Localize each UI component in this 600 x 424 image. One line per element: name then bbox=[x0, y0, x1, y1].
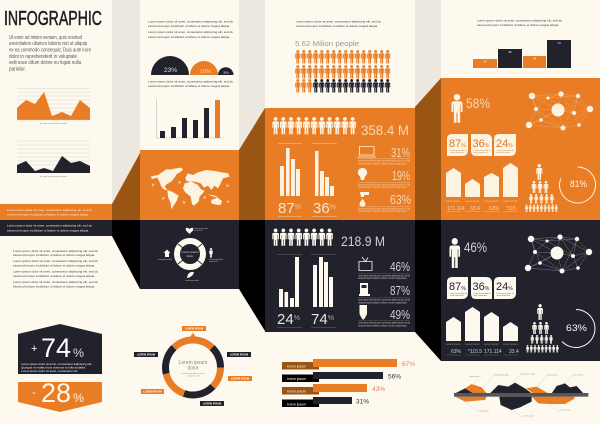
horizontal bars: lorem ipsum bbox=[287, 377, 306, 381]
house bars orange: *115 bbox=[506, 206, 516, 212]
timeline chart: Lorem ipsum dolor bbox=[493, 375, 509, 377]
callout: -28%: - bbox=[32, 387, 36, 399]
timeline chart: Lorem ipsum bbox=[478, 411, 489, 413]
band text: dark bbox=[7, 224, 92, 232]
house bars dark: *115.5 bbox=[468, 349, 482, 355]
column 3 text: eiusmod tempor incididunt ut labore et dolore magna aliqua. bbox=[296, 24, 378, 28]
stat: bulb 49%: 49% bbox=[390, 307, 410, 322]
cards orange: 24% bbox=[496, 138, 513, 150]
band text: orange bbox=[7, 208, 92, 216]
horizontal bars: lorem ipsum bbox=[287, 390, 306, 394]
icon: person bbox=[209, 248, 213, 258]
people row dark bbox=[272, 228, 333, 246]
ring labels: LOREM IPSUM bbox=[143, 390, 162, 394]
orange bar group 87% bbox=[278, 143, 302, 217]
horizontal bars: 67% bbox=[402, 361, 415, 368]
horizontal bars: 56% bbox=[388, 374, 401, 380]
semicircle chart: 16% bbox=[200, 69, 211, 75]
icon: house bbox=[164, 250, 170, 257]
cards dark: Lorem ipsum dolor sit bbox=[450, 292, 468, 295]
cards orange bbox=[447, 134, 516, 156]
cards dark: 36% bbox=[472, 281, 490, 293]
column chart top right: 52 bbox=[508, 50, 512, 54]
band text: orange: eiusmod tempor incididunt ut labore et dolore magna aliqua. bbox=[7, 212, 89, 216]
column 4 text bbox=[477, 18, 562, 27]
stat: pump 87%: eiusmod tempor incididunt ut labore et dolore magna aliqua. bbox=[358, 302, 407, 304]
stat: bulb 49%: Lorem ipsum dolor sit amet, consectetur adipiscing elit, sed do bbox=[358, 322, 411, 324]
cycle diagram: Lorem ipsum bbox=[181, 250, 199, 254]
house bars orange: 63% bbox=[489, 206, 500, 212]
timeline chart: Lorem ipsum bbox=[469, 376, 480, 378]
cards dark: amet consectetur bbox=[450, 294, 464, 297]
timeline chart: Lorem ipsum dolor bbox=[520, 374, 536, 376]
text block lower left: eiusmod tempor incididunt ut labore et dolore magna aliqua. bbox=[13, 253, 95, 257]
text block lower left: Lorem ipsum dolor sit amet, consectetur adipiscing elit, sed do bbox=[13, 249, 98, 253]
ring labels: LOREM IPSUM bbox=[230, 352, 248, 356]
stat: laptop 31%: 31% bbox=[391, 145, 410, 160]
intro paragraph: pariatur. bbox=[9, 66, 26, 72]
ring chart: dolor bbox=[187, 366, 199, 372]
area chart: orange bbox=[17, 88, 90, 125]
horizontal bars: 31% bbox=[356, 398, 369, 406]
house bars orange: Lorem ipsum bbox=[484, 200, 498, 203]
colour panels bbox=[0, 78, 600, 361]
house bars orange: 171.114 bbox=[447, 206, 465, 212]
cards orange: 36% bbox=[472, 138, 490, 150]
callout: +74%: 74 bbox=[41, 333, 71, 363]
people row orange bbox=[272, 117, 356, 134]
cards dark bbox=[447, 277, 516, 299]
orange bar group 36% bbox=[312, 143, 337, 217]
callout: -28% bbox=[18, 378, 102, 412]
cycle diagram: dolor bbox=[187, 254, 193, 258]
donut arc 63%: 63% bbox=[566, 323, 587, 333]
column chart top right: 74 bbox=[557, 41, 561, 45]
stat: pump 87%: Lorem ipsum dolor sit amet, consectetur adipiscing elit, sed do bbox=[358, 298, 411, 302]
cycle diagram bbox=[158, 227, 223, 282]
stat: tv 46%: eiusmod tempor incididunt ut labore et dolore magna aliqua. bbox=[358, 277, 407, 280]
callout: +74%: Quisque et mattis risus vivamus a nulla sodales. bbox=[21, 366, 86, 370]
house bars dark: 171.114 bbox=[484, 349, 502, 355]
area chart: dark bbox=[17, 141, 90, 178]
network diagram dark bbox=[525, 234, 592, 274]
column 2 text: eiusmod tempor incididunt ut labore et dolore magna aliqua. bbox=[148, 24, 230, 28]
network diagram orange bbox=[526, 91, 593, 130]
icon: heart bbox=[186, 228, 193, 234]
fold panels bbox=[112, 0, 441, 361]
bar chart bbox=[156, 99, 224, 138]
text block lower left bbox=[13, 249, 98, 288]
dark bar group 24% bbox=[277, 254, 302, 328]
column chart top right: 24 bbox=[483, 60, 487, 64]
icon: tv bbox=[359, 257, 372, 270]
stat: faucet 63%: 63% bbox=[390, 192, 411, 207]
callout: -28%: 28 bbox=[41, 378, 71, 408]
icon: faucet bbox=[360, 192, 369, 207]
callout: -28%: % bbox=[73, 391, 84, 405]
stat: bulb 49% bbox=[358, 305, 411, 328]
timeline chart: Lorem ipsum bbox=[559, 410, 570, 412]
people pictogram bbox=[295, 50, 390, 92]
stat: faucet 63%: Lorem ipsum dolor sit amet, consectetur adipiscing elit, sed do bbox=[358, 208, 411, 210]
people pyramid orange bbox=[525, 164, 558, 212]
cycle captions: Lorem ipsum dolor bbox=[158, 258, 172, 261]
icon: energy bulb bbox=[360, 305, 367, 320]
column chart top right: 28 bbox=[533, 56, 536, 60]
house bars orange: Lorem ipsum bbox=[465, 200, 479, 203]
house bars orange: Lorem ipsum bbox=[446, 200, 460, 203]
icon: fuel pump bbox=[359, 283, 370, 296]
orange bar group 87%: 87 bbox=[278, 200, 295, 217]
cycle captions bbox=[158, 227, 223, 282]
house bars orange bbox=[446, 163, 518, 212]
ring labels: LOREM IPSUM bbox=[185, 326, 203, 330]
semicircle chart: 23% bbox=[164, 67, 177, 74]
stat: bulb 49%: eiusmod tempor incididunt ut labore et dolore magna aliqua. bbox=[358, 324, 407, 328]
semicircle caption: Lorem ipsum dolor sit amet, consectetur adipiscing elit, sed do bbox=[148, 80, 233, 84]
cards orange: amet consectetur bbox=[474, 151, 488, 154]
cards dark: 87% bbox=[449, 281, 466, 293]
cards dark: 24% bbox=[496, 281, 513, 293]
house bars dark: 33.4 bbox=[509, 349, 519, 355]
column 2 text: Lorem ipsum dolor sit amet, consectetur adipiscing elit, sed do bbox=[148, 20, 233, 24]
area chart: orange: In non consectetur enim bbox=[40, 122, 67, 125]
ring chart: Lorem ipsum dolor sit amet bbox=[182, 372, 205, 375]
horizontal bars bbox=[282, 359, 415, 407]
ring labels bbox=[134, 326, 252, 406]
ring labels: LOREM IPSUM bbox=[137, 352, 155, 356]
column 3 text bbox=[296, 20, 381, 28]
stat: 358.4 M: 358.4 M bbox=[361, 122, 409, 138]
stat: person 58% bbox=[451, 94, 490, 123]
horizontal bars: lorem ipsum bbox=[287, 364, 306, 368]
stat: bulb 19%: eiusmod tempor incididunt ut labore et dolore magna aliqua. bbox=[358, 186, 407, 189]
callout: +74%: % bbox=[73, 346, 84, 360]
dark bar group 24%: % bbox=[294, 315, 300, 322]
house bars dark: Lorem ipsum bbox=[484, 343, 498, 346]
band text: orange: Lorem ipsum dolor sit amet, consectetur adipiscing elit, sed do bbox=[7, 208, 92, 212]
column 4 text: eiusmod tempor incididunt ut labore et dolore magna aliqua. bbox=[477, 23, 559, 27]
stat: bulb 19% bbox=[358, 168, 411, 189]
ring labels: LOREM IPSUM bbox=[231, 376, 249, 380]
stat: person 46% bbox=[449, 238, 487, 268]
ring chart: Lorem ipsum bbox=[179, 360, 207, 366]
column 2 text: eiusmod tempor incididunt ut labore et dolore magna aliqua. bbox=[148, 35, 230, 39]
cards orange: amet consectetur bbox=[450, 151, 464, 154]
horizontal bars: lorem ipsum bbox=[287, 402, 306, 406]
intro paragraph: exercitation ullamco laboris nisi ut aliquip bbox=[9, 41, 87, 47]
orange bar group 36%: % bbox=[330, 204, 336, 211]
orange bar group 87%: % bbox=[295, 204, 301, 211]
dark bar group 74% bbox=[311, 254, 336, 328]
text block lower left: eiusmod tempor incididunt ut labore et dolore magna aliqua. bbox=[13, 264, 95, 268]
semicircle chart: 5% bbox=[224, 71, 229, 75]
stat: faucet 63%: eiusmod tempor incididunt ut labore et dolore magna aliqua. bbox=[358, 210, 407, 213]
stat: pump 87%: 87% bbox=[390, 283, 410, 298]
column 2 text bbox=[148, 20, 233, 39]
cards orange: amet consectetur bbox=[496, 151, 511, 154]
icon: world map bbox=[151, 168, 230, 209]
semicircle chart bbox=[151, 56, 234, 75]
dark bar group 24%: 24 bbox=[277, 311, 294, 328]
cards dark: amet consectetur bbox=[496, 294, 511, 297]
horizontal bars: 43% bbox=[372, 386, 385, 393]
callout: +74%: Lorem ipsum dolor sit amet, consectetur elit. bbox=[21, 369, 78, 373]
band text: dark: Lorem ipsum dolor sit amet, consectetur adipiscing elit, sed do bbox=[7, 224, 92, 228]
house bars dark bbox=[446, 307, 519, 355]
stat: person 46%: 46% bbox=[464, 239, 487, 255]
people pyramid dark bbox=[526, 304, 559, 352]
stat: bulb 19%: 19% bbox=[392, 168, 410, 183]
text block lower left: Lorem ipsum dolor sit amet, consectetur adipiscing elit, sed do bbox=[13, 259, 98, 263]
text block lower left: Lorem ipsum dolor sit amet, consectetur adipiscing elit, sed do bbox=[13, 270, 98, 274]
cards dark: Lorem ipsum dolor sit bbox=[496, 292, 514, 295]
callout: +74%: + bbox=[31, 343, 37, 355]
cards orange: Lorem ipsum dolor sit bbox=[450, 149, 468, 152]
semicircle caption: eiusmod tempor incididunt ut labore et dolore magna aliqua. bbox=[148, 84, 230, 88]
dark bar group 74%: % bbox=[328, 315, 334, 322]
stat: tv 46%: 46% bbox=[390, 259, 410, 274]
stat: laptop 31%: eiusmod tempor incididunt ut labore et dolore magna aliqua. bbox=[358, 162, 407, 166]
stat: tv 46%: Lorem ipsum dolor sit amet, consectetur adipiscing elit, sed do bbox=[358, 274, 411, 278]
house bars dark: 63% bbox=[451, 349, 462, 355]
timeline chart bbox=[454, 374, 588, 418]
callout: +74%: Lorem ipsum dolor sit amet, consectetur adipiscing elit, bbox=[21, 362, 92, 366]
stat: faucet 63% bbox=[358, 192, 411, 213]
cycle captions: sit amet elit bbox=[194, 229, 203, 232]
icon: bulb bbox=[358, 168, 367, 180]
stat: pump 87% bbox=[358, 283, 411, 304]
icon: laptop bbox=[358, 146, 376, 157]
cards dark: amet consectetur bbox=[474, 294, 488, 297]
intro paragraph bbox=[9, 35, 91, 72]
donut arc 81%: 81% bbox=[570, 179, 587, 189]
house bars dark: Lorem ipsum bbox=[446, 343, 460, 346]
text block lower left: Lorem ipsum dolor sit amet, consectetur adipiscing elit, sed do bbox=[13, 280, 98, 284]
house bars dark: Lorem ipsum bbox=[465, 343, 479, 346]
band text: dark: eiusmod tempor incididunt ut labore et dolore magna aliqua. bbox=[7, 228, 89, 232]
text block lower left: eiusmod tempor incididunt ut labore et dolore magna aliqua. bbox=[13, 274, 95, 278]
stat: tv 46% bbox=[358, 257, 411, 280]
title: INFOGRAPHIC bbox=[4, 8, 102, 30]
column 3 text: Lorem ipsum dolor sit amet, consectetur adipiscing elit, sed do bbox=[296, 20, 381, 24]
house bars orange: Lorem ipsum bbox=[503, 200, 517, 203]
column 4 text: Lorem ipsum dolor sit amet, consectetur adipiscing elit, sed do bbox=[477, 18, 562, 22]
cards dark: Lorem ipsum dolor sit bbox=[474, 292, 491, 295]
timeline chart: Lorem ipsum bbox=[523, 416, 534, 418]
text block lower left: eiusmod tempor incididunt ut labore et dolore magna aliqua. bbox=[13, 284, 95, 288]
cycle captions: Lorem ipsum dolor bbox=[209, 258, 223, 261]
house bars orange: 33.4 bbox=[470, 206, 480, 212]
intro paragraph: ex ea commodo consequat. Duis aute irure bbox=[9, 48, 91, 54]
ring chart bbox=[134, 326, 252, 406]
timeline chart: Lorem ipsum bbox=[547, 375, 558, 377]
house bars dark: Lorem ipsum bbox=[503, 343, 517, 346]
column 2 text: Lorem ipsum dolor sit amet, consectetur adipiscing elit, sed do bbox=[148, 30, 233, 34]
population heading: 5.62 Milion people bbox=[295, 41, 359, 48]
stat: laptop 31%: Lorem ipsum dolor sit amet, consectetur adipiscing elit, sed do bbox=[358, 160, 411, 162]
cycle captions: Lorem ipsum dolor bbox=[185, 279, 199, 282]
intro paragraph: velit esse cillum dolore eu fugiat nulla bbox=[9, 60, 81, 66]
donut arc 63% bbox=[562, 310, 595, 347]
timeline chart: Lorem ipsum bbox=[573, 375, 584, 377]
stat: bulb 19%: Lorem ipsum dolor sit amet, consectetur adipiscing elit, sed do bbox=[358, 184, 411, 186]
intro paragraph: dolor in reprehenderit in voluptate bbox=[9, 54, 77, 60]
cards orange: 87% bbox=[449, 138, 466, 150]
ring labels: LOREM IPSUM bbox=[203, 402, 221, 406]
column chart top right bbox=[473, 40, 571, 68]
cycle captions: Lorem ipsum dolor bbox=[194, 227, 208, 230]
cards orange: Lorem ipsum dolor sit bbox=[496, 149, 514, 152]
cycle captions: sit amet elit bbox=[209, 260, 218, 263]
callout: +74% bbox=[18, 324, 102, 374]
intro paragraph: Ut enim ad minim veniam, quis nostrud bbox=[9, 35, 82, 41]
dark bar group 74%: 74 bbox=[311, 311, 328, 328]
icon: leaf bbox=[187, 272, 194, 278]
stat: laptop 31% bbox=[358, 145, 411, 166]
semicircle caption bbox=[148, 80, 233, 88]
orange bar group 36%: 36 bbox=[313, 200, 330, 217]
donut arc 81% bbox=[560, 167, 596, 203]
ring chart: consectetur elit bbox=[187, 374, 200, 378]
cards orange: Lorem ipsum dolor sit bbox=[474, 149, 491, 152]
stat: 218.9 M: 218.9 M bbox=[341, 233, 385, 249]
stat: person 58%: 58% bbox=[466, 95, 490, 111]
area chart: dark: In non consectetur enim bbox=[40, 175, 67, 178]
